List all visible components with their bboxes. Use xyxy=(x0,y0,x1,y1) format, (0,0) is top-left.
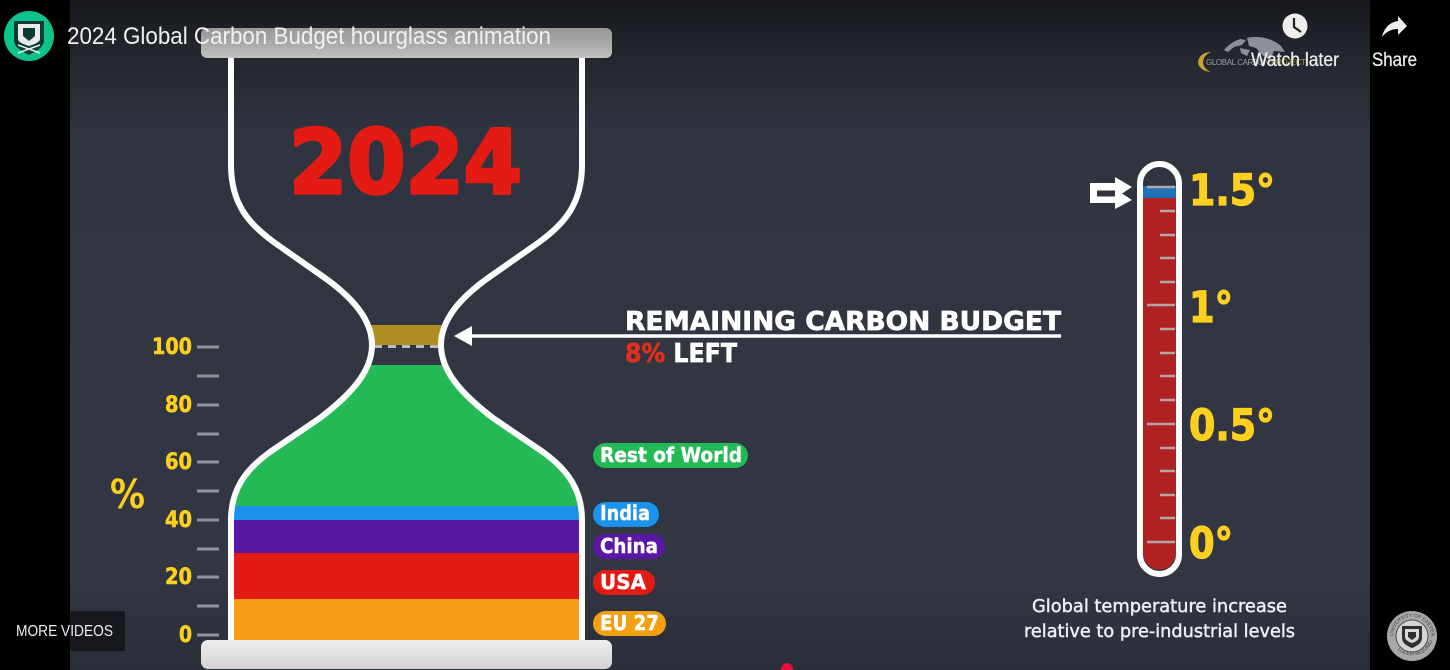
legend: India: India xyxy=(600,501,650,525)
axis ticks xyxy=(197,347,219,635)
crescent xyxy=(1198,52,1211,72)
share label: Share xyxy=(1372,50,1417,71)
legend xyxy=(593,443,748,636)
thermometer xyxy=(1024,164,1295,642)
watch later button xyxy=(1251,14,1340,71)
channel avatar xyxy=(4,11,54,61)
percent axis xyxy=(110,335,219,648)
bottom sand stack xyxy=(225,325,590,640)
temperature labels: 0.5° xyxy=(1189,401,1275,451)
more videos button xyxy=(16,611,125,651)
temperature labels xyxy=(1189,166,1275,569)
globe xyxy=(1224,37,1285,60)
tube outline xyxy=(1140,164,1179,574)
year heading: 2024 xyxy=(289,111,522,214)
legend: Rest of World: Rest of World xyxy=(600,443,742,467)
video title: 2024 Global Carbon Budget hourglass animation xyxy=(67,23,551,50)
axis labels: 80 xyxy=(165,393,192,418)
watch later label: Watch later xyxy=(1251,50,1340,71)
clock icon xyxy=(1282,14,1308,38)
share button xyxy=(1372,16,1417,71)
remaining budget callout xyxy=(454,307,1061,369)
axis labels: 100 xyxy=(152,335,192,360)
hourglass xyxy=(201,28,612,669)
thermometer caption xyxy=(1024,596,1295,642)
scale ticks xyxy=(1147,187,1175,542)
legend: EU 27: EU 27 xyxy=(600,611,659,635)
bottom cap xyxy=(201,640,612,669)
thermometer caption: Global temperature increase xyxy=(1032,596,1287,617)
temperature labels: 1° xyxy=(1189,283,1233,333)
axis labels xyxy=(152,335,192,648)
legend: China: China xyxy=(600,534,658,558)
temperature labels: 1.5° xyxy=(1189,166,1275,216)
mercury xyxy=(1143,186,1176,570)
progress marker xyxy=(781,663,793,670)
callout heading: REMAINING CARBON BUDGET xyxy=(625,307,1061,337)
legend: USA: USA xyxy=(600,570,647,594)
glass outline xyxy=(231,57,582,640)
callout value: 8% LEFT xyxy=(625,339,737,369)
axis labels: 20 xyxy=(165,565,192,590)
axis labels: 40 xyxy=(165,508,192,533)
university seal: UNIVERSITY OF EXETER xyxy=(1390,614,1434,636)
thermometer caption: relative to pre-industrial levels xyxy=(1024,621,1295,642)
temperature labels: 0° xyxy=(1189,519,1233,569)
axis labels: 60 xyxy=(165,450,192,475)
project logo xyxy=(1198,37,1306,72)
share icon xyxy=(1382,16,1407,37)
axis labels: 0 xyxy=(179,623,192,648)
percent sign: % xyxy=(110,472,145,518)
pointer arrow xyxy=(1090,177,1132,209)
more videos button: MORE VIDEOS xyxy=(16,623,113,640)
university seal: LUCEM SEQUIMUR xyxy=(1398,640,1432,656)
top cap xyxy=(201,28,612,58)
logo text: GLOBAL CARBON PROJECT xyxy=(1206,58,1306,67)
arrow xyxy=(454,326,1061,346)
